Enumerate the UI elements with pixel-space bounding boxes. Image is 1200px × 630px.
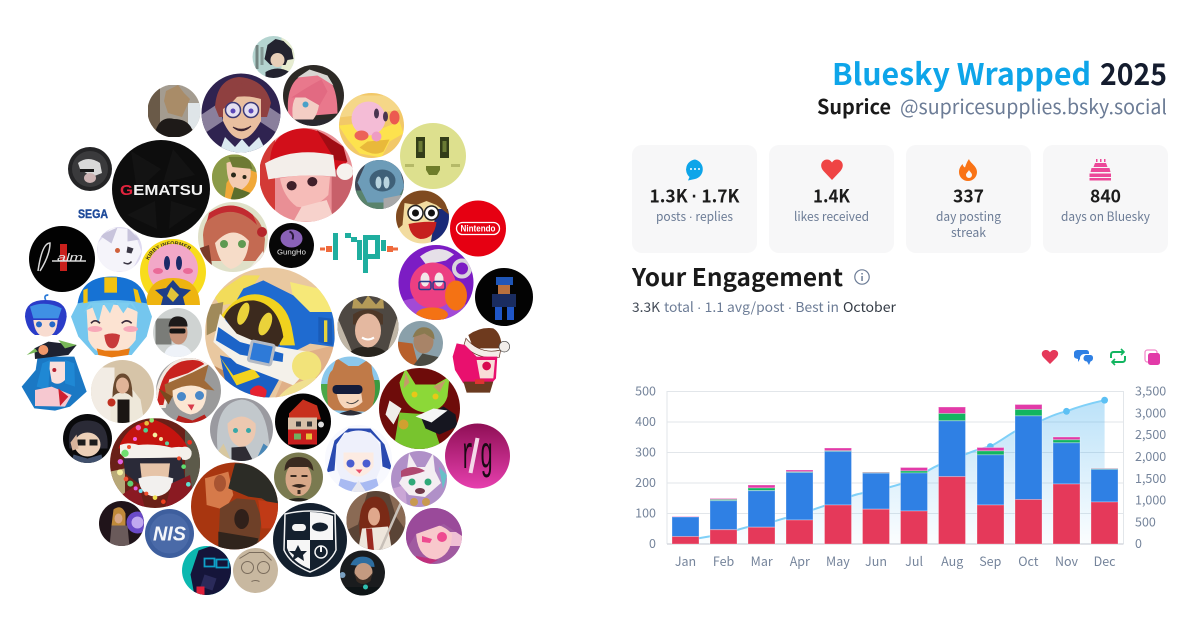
avatar: woman in jacket photo <box>90 360 154 424</box>
month labels: Nov <box>1055 551 1079 570</box>
avatar: kirby on star <box>338 92 404 158</box>
avatar: Nintendo logo <box>450 200 506 256</box>
avatar: crowned man <box>337 296 399 358</box>
left axis labels <box>635 380 656 552</box>
avatar: white hair blue ribbon maid <box>327 428 391 492</box>
avatar: brown hair grinning cartoon <box>396 190 450 244</box>
card: likes <box>769 145 894 253</box>
right axis labels: 0 <box>1135 533 1142 552</box>
line: cumulative <box>686 397 1108 540</box>
bar: Jun <box>862 472 890 544</box>
avatar: dark hair shades <box>62 414 112 464</box>
right axis labels: 3,500 <box>1135 380 1166 400</box>
avatar: orange suit man <box>398 320 444 366</box>
avatar: purple pink girl <box>406 508 462 564</box>
engagement summary: October <box>843 296 897 316</box>
avatar: white fox <box>96 226 142 272</box>
avatar: chibi santa pink hair <box>453 328 510 393</box>
card: likes: likes received <box>794 206 869 225</box>
bar: May <box>824 448 852 544</box>
card: days: days on Bluesky <box>1061 206 1150 225</box>
avatar cloud <box>22 36 533 596</box>
avatar: santa hat pink-tinted girl <box>260 127 357 223</box>
area: cumulative <box>686 400 1105 544</box>
logo: SEGA: SEGA <box>78 207 108 221</box>
handle: @supricesupplies.bsky.social <box>900 91 1167 120</box>
avatar: r/g logo: g <box>480 430 493 482</box>
avatar: blurry red dog photo <box>188 462 282 552</box>
avatar: pink kirby with glasses <box>398 244 474 322</box>
avatar: blue long hair peach hat <box>22 340 87 411</box>
bar: Sep <box>977 448 1004 544</box>
engagement summary: total · 1.1 avg/post · Best in <box>664 296 839 316</box>
avatar: pixel red house on black <box>275 394 331 450</box>
left axis labels: 100 <box>635 502 656 522</box>
engagement summary <box>632 296 897 316</box>
bar: Aug <box>938 407 966 544</box>
bar: Nov <box>1053 437 1080 544</box>
legend icons <box>1042 349 1160 365</box>
left axis labels: 400 <box>635 411 656 430</box>
month labels: Jul <box>905 551 923 570</box>
right axis labels <box>1135 380 1166 552</box>
avatar: GungHo logo <box>269 223 314 268</box>
card: days <box>1043 145 1168 253</box>
avatar: bearded man blue cap <box>340 550 386 596</box>
bar: Mar <box>748 485 775 544</box>
avatar: shield logo <box>273 503 347 577</box>
avatar: dark fantasy woman <box>99 501 144 546</box>
engagement summary: 3.3K <box>632 296 660 316</box>
left axis labels: 500 <box>635 380 656 400</box>
bar: Feb <box>710 498 737 544</box>
card: likes: 1.4K <box>813 182 851 208</box>
avatar: Kirby Informer badge: KIRBY INFORMER <box>146 241 191 260</box>
avatar: Gematsu logo <box>112 140 210 238</box>
avatar: cosplay red hair <box>346 490 406 550</box>
avatar: maid pink hair <box>282 64 344 128</box>
icon: replies legend <box>1074 350 1093 365</box>
right axis labels: 2,500 <box>1135 424 1166 443</box>
month labels: Oct <box>1018 551 1039 570</box>
right axis labels: 500 <box>1135 512 1156 530</box>
avatar: Palmer black logo <box>29 226 95 292</box>
avatar: cat ears sunglasses <box>320 356 380 416</box>
avatar: red hair glasses on purple <box>201 73 281 153</box>
month labels: Jun <box>865 551 887 570</box>
icon: likes legend <box>1042 350 1058 364</box>
icon: flame <box>959 159 977 181</box>
avatar: NIS logo <box>145 509 194 558</box>
bar: Dec <box>1091 468 1118 544</box>
card: posts and replies: 1.3K · 1.7K <box>650 182 740 208</box>
right axis labels: 3,000 <box>1135 402 1166 422</box>
heading: Your Engagement: Your Engagement <box>631 258 843 293</box>
avatar: chibi dark-haired boy <box>252 36 294 78</box>
avatar: NIS logo: NIS <box>153 524 187 546</box>
icon: info <box>855 270 869 284</box>
month labels: Jan <box>675 551 696 570</box>
card: posts and replies <box>632 145 757 253</box>
avatar: silver hair girl <box>210 398 274 462</box>
bar: Apr <box>786 470 813 544</box>
title year: 2025 <box>1100 50 1167 94</box>
month labels: Mar <box>751 551 773 570</box>
avatar: white hair dark <box>68 147 112 191</box>
card: streak: 337 <box>953 182 984 208</box>
avatar: santa hat anime boy <box>156 358 222 424</box>
right axis labels: 2,000 <box>1135 446 1166 465</box>
card: streak <box>906 145 1031 253</box>
month labels: May <box>826 551 850 570</box>
avatar: santa with christmas lights <box>110 418 202 508</box>
avatar: pixel face <box>400 123 466 189</box>
month labels: Sep <box>979 551 1002 570</box>
card: posts and replies: posts · replies <box>656 206 733 225</box>
avatar: Kirby Informer badge <box>140 239 206 305</box>
bar: Oct <box>1015 404 1042 544</box>
logo: MP teal pixel waveform <box>320 233 398 273</box>
avatar: green cat red background <box>378 368 460 450</box>
avatar: vader with glasses <box>182 546 232 596</box>
left axis labels: 200 <box>635 472 656 491</box>
avatar: Nintendo logo: Nintendo <box>460 224 496 234</box>
avatar: r/g logo: r <box>462 430 474 482</box>
stacked bars <box>672 404 1118 544</box>
icon: quotes legend <box>1145 350 1160 365</box>
icon: reposts legend <box>1111 349 1125 365</box>
avatar: Magolor large <box>205 268 335 398</box>
avatar: Palmer black logo: alm <box>57 252 83 264</box>
chart: monthly engagement <box>635 380 1166 570</box>
left axis labels: 300 <box>635 442 656 460</box>
month labels <box>675 551 1116 570</box>
icon: cake <box>1090 159 1111 180</box>
card: streak: day posting <box>936 206 1001 225</box>
title: Bluesky Wrapped <box>832 50 1091 94</box>
right axis labels: 1,000 <box>1135 490 1166 508</box>
avatar: green haired elf <box>212 154 258 200</box>
icon: heart <box>821 160 843 180</box>
month labels: Feb <box>713 551 735 570</box>
avatar: blue robot <box>354 160 404 210</box>
card: streak: streak <box>951 222 986 241</box>
left axis labels: 0 <box>649 533 656 552</box>
icon: chat bubble <box>686 160 703 180</box>
avatar: Gematsu logo: GEMATSU <box>120 182 203 199</box>
month labels: Apr <box>790 551 810 570</box>
avatar: r/g logo <box>445 424 510 488</box>
bar: Jan <box>672 516 699 544</box>
avatar: blue hat laughing girl <box>71 277 152 357</box>
avatar: red braid girl <box>197 202 268 272</box>
bar: Jul <box>900 468 928 544</box>
avatar: pixel boy on black <box>475 268 533 326</box>
month labels: Aug <box>941 551 963 570</box>
month labels: Dec <box>1094 551 1116 570</box>
avatar: mustached man <box>274 452 324 502</box>
card: days: 840 <box>1090 182 1121 208</box>
display name: Suprice <box>817 91 891 120</box>
avatar: sunglasses man <box>152 308 202 358</box>
avatar: pastel fox <box>391 451 447 507</box>
avatar: GungHo logo: GungHo <box>277 248 306 256</box>
avatar: cat mask photo <box>148 85 202 137</box>
avatar: blue hair chibi <box>25 295 67 337</box>
right axis labels: 1,500 <box>1135 468 1166 487</box>
avatar: pencil sketch <box>232 548 278 594</box>
